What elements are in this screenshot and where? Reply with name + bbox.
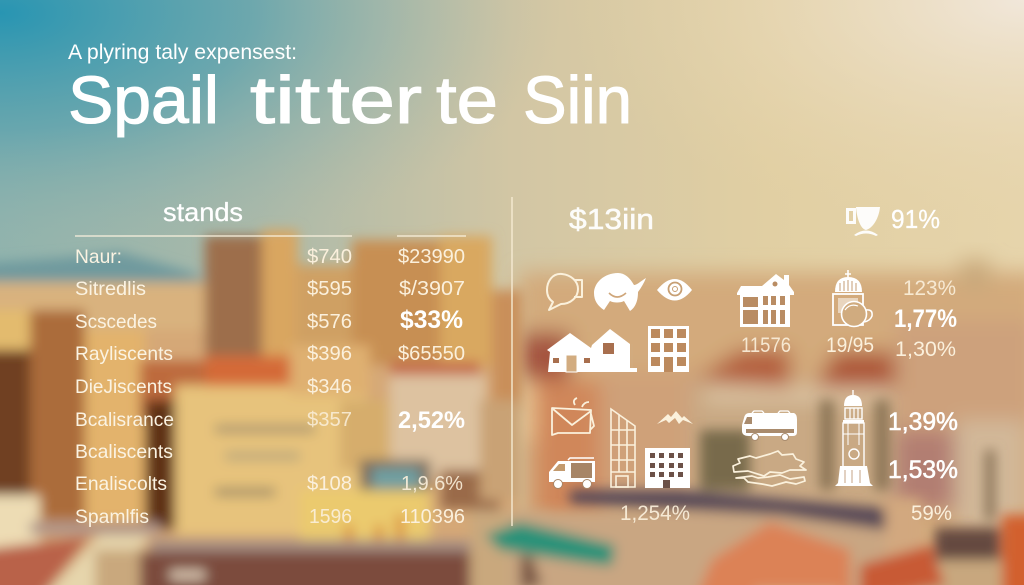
- icon: flat cloud shapes: [733, 451, 806, 486]
- first value column: $576: [307, 310, 352, 333]
- percentage: 91%: [891, 204, 940, 234]
- row labels: Rayliscents: [75, 343, 173, 365]
- row labels: DieJiscents: [75, 376, 172, 398]
- row labels: Spamlfis: [75, 506, 149, 528]
- row labels: Naur:: [75, 246, 122, 268]
- icon: cup: [846, 207, 880, 236]
- main figure: $13iin: [569, 204, 654, 236]
- icon: houses: [547, 329, 637, 372]
- table header rules: [75, 235, 466, 237]
- metric labels: lower group: 59%: [911, 502, 952, 525]
- first value column: [307, 245, 352, 528]
- second value column: $/3907: [399, 277, 465, 300]
- title: [68, 63, 632, 138]
- metric labels: lower group: 1,39%: [888, 408, 958, 436]
- first value column: $346: [307, 375, 352, 398]
- icon: clock tower: [835, 390, 873, 486]
- first value column: 1596: [309, 505, 352, 528]
- panel: expense table: [75, 197, 466, 528]
- second value column: $33%: [400, 306, 463, 334]
- first value column: $740: [307, 245, 352, 268]
- icon: van: [549, 458, 595, 488]
- table heading: stands: [163, 197, 243, 227]
- metric labels: upper right group: [741, 277, 957, 361]
- row labels: Enaliscolts: [75, 473, 167, 495]
- second value column: 2,52%: [398, 407, 465, 434]
- metric labels: upper right group: 123%: [903, 277, 956, 300]
- row labels: Scscedes: [75, 311, 157, 333]
- first value column: $595: [307, 277, 352, 300]
- metric labels: upper right group: 19/95: [826, 334, 874, 357]
- icon: domed building with cup: [833, 270, 872, 326]
- title: te: [436, 63, 498, 138]
- row labels: Sitredlis: [75, 278, 146, 300]
- title: Siin: [523, 63, 632, 138]
- metric labels: upper right group: 1,77%: [894, 305, 957, 333]
- row labels: Bcalisrance: [75, 409, 174, 431]
- icon: eye: [657, 279, 692, 300]
- second value column: $23990: [398, 245, 465, 268]
- metric labels: lower group: [620, 408, 958, 525]
- first value column: $396: [307, 342, 352, 365]
- icon: speech bubble: [547, 274, 582, 310]
- first value column: $108: [307, 472, 352, 495]
- metric labels: lower group: 1,53%: [888, 456, 958, 484]
- icon: mountain: [657, 411, 693, 424]
- icon: office block: [645, 448, 690, 488]
- icon: chat blob with tail: [594, 273, 646, 311]
- row labels: Bcaliscents: [75, 441, 173, 463]
- first value column: $357: [307, 408, 352, 431]
- metric labels: upper right group: 11576: [741, 334, 791, 357]
- second value column: $65550: [398, 342, 465, 365]
- row labels: [75, 246, 174, 528]
- title: tit: [250, 63, 321, 138]
- metric labels: upper right group: 1,30%: [895, 338, 956, 361]
- subtitle: A plyring taly expensest:: [68, 41, 297, 64]
- second value column: [398, 245, 465, 528]
- icon: mansion: [737, 274, 794, 327]
- vertical divider: [511, 197, 513, 526]
- metric labels: lower group: 1,254%: [620, 502, 690, 525]
- title: Spail: [68, 63, 219, 138]
- title: ter: [327, 63, 422, 138]
- icon: bus: [742, 411, 797, 440]
- icon: envelope: [552, 398, 594, 435]
- icon: glass tower: [611, 409, 635, 487]
- icon: apartment block: [648, 326, 689, 372]
- second value column: 110396: [400, 505, 465, 528]
- second value column: 1,9.6%: [401, 472, 463, 495]
- panel: statistics header: [569, 204, 940, 236]
